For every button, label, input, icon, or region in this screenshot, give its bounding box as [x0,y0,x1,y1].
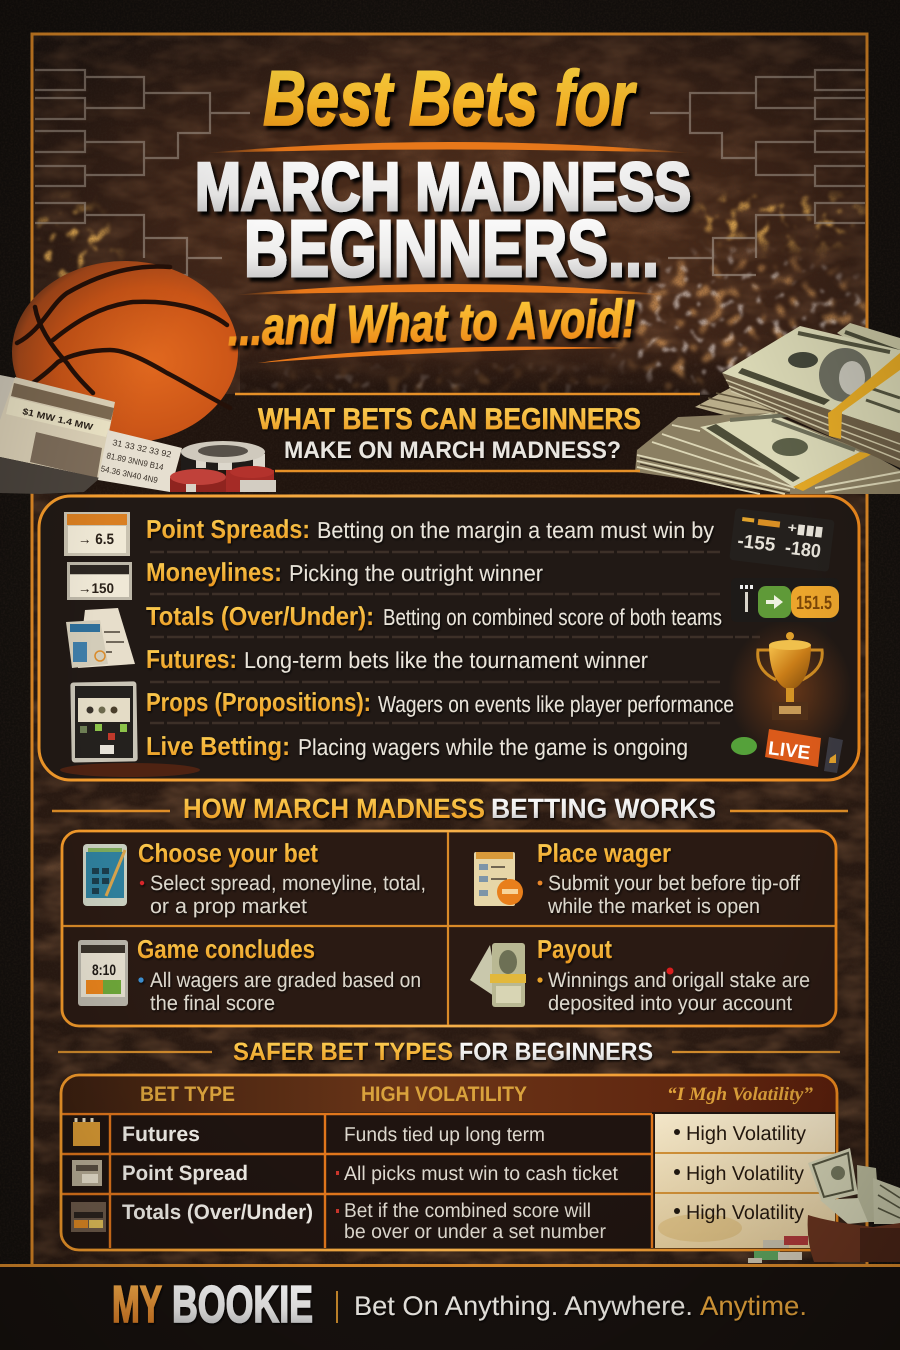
step: game concludes: All wagers are graded based on [150,969,421,992]
row: totals: Betting on combined score of both teams [383,604,722,630]
tagline: Anytime. [700,1291,807,1321]
step: choose your bet: Choose your bet [138,838,318,868]
title line: Beginners: BEGINNERS... [244,204,659,293]
row: totals [146,601,722,631]
section heading: how it works: HOW MARCH MADNESS [183,793,485,824]
logo [112,1276,313,1334]
section heading: how it works: BETTING WORKS [491,793,716,824]
row: point spread [122,1162,804,1185]
icon: total line [731,578,839,622]
lower strap [793,452,872,491]
upper stack top [722,326,900,433]
row: totals: Totals (Over/Under): [146,601,374,631]
upper strap [828,353,900,439]
section heading: safer bet types: SAFER BET TYPES [233,1038,453,1066]
icon: spread card [72,1160,102,1186]
icon: trophy [758,632,822,720]
section heading: safer bet types: FOR BEGINNERS [459,1038,653,1066]
betting tickets [0,375,182,494]
row: point spread: High Volatility [686,1163,804,1185]
icon: moneyline ticket [67,562,132,600]
icon: odds board [729,508,835,572]
ticket large [0,377,115,478]
step: payout: deposited into your account [548,992,792,1015]
row: point spread: All picks must win to cash ticket [344,1163,618,1185]
icon: phone with pen [83,844,127,906]
row: props: Props (Propositions): [146,687,371,717]
icon: odds board: +▮▮▮ [787,520,824,539]
icon: props tablet [70,681,138,762]
title line: Best Bets for: Best Bets for [263,54,637,142]
table header band: HIGH VOLATILITY [361,1083,527,1106]
row: futures [146,644,648,674]
row: live betting [146,731,688,761]
step: place wager: Submit your bet before tip-off [548,872,800,895]
title line: and what to avoid: ...and What to Avoid! [227,289,636,357]
icon: totals board [71,1202,106,1232]
section heading: what bets: MAKE ON MARCH MADNESS? [284,437,621,464]
icon: total line: 151.5 [796,593,832,614]
front bill [808,1148,858,1202]
step: game concludes [137,934,421,1015]
icon: spread ticket [64,512,130,556]
step: place wager [537,838,800,918]
icon: live badge [731,729,843,773]
betting tickets: $1 MW 1.4 MW [22,406,95,432]
section heading: what bets [235,394,700,471]
tagline: Bet On Anything. Anywhere. [354,1291,693,1321]
panel: bet types [39,496,859,780]
swoosh above march madness [205,142,692,153]
row: futures: Funds tied up long term [344,1124,545,1146]
step: choose your bet [138,838,426,918]
row: moneylines: Picking the outright winner [289,560,543,586]
row: point spread: Point Spread [122,1162,248,1185]
step: payout [537,934,810,1015]
section heading: safer bet types [58,1038,840,1066]
ticket dark base [0,457,100,494]
icon: wager slip [474,852,523,906]
icon: live badge: LIVE [767,738,811,764]
step: payout: Payout [537,934,612,964]
title [195,54,692,363]
section heading: how it works [52,793,848,824]
title line: March Madness: MARCH MADNESS [195,149,691,225]
row: totals: Totals (Over/Under) [122,1201,313,1224]
row: totals [122,1200,804,1243]
row: totals: be over or under a set number [344,1221,606,1243]
betting tickets: 31 33 32 33 92 [112,437,173,459]
icon: odds board: -155 [736,531,777,556]
icon: totals sheet [66,608,135,668]
logo: MY [112,1276,162,1334]
table header band: “I Mgh Volatility” [667,1084,814,1105]
stacks of cash [635,323,900,494]
tournament brackets [35,70,865,275]
icon: score tablet: 8:10 [92,962,116,979]
swoosh under avoid [258,347,622,363]
red speck [666,968,674,974]
step: choose your bet: Select spread, moneyline, total, [150,872,426,895]
row: live betting: Placing wagers while the game is ongoing [298,734,688,760]
icon: spread ticket: → 6.5 [78,531,114,548]
row: futures: Long-term bets like the tournament winner [244,647,648,673]
betting tickets: 54.36 3N40 4N9 [100,463,159,485]
step: choose your bet: or a prop market [150,895,307,918]
row: moneylines: Moneylines: [146,557,282,587]
row: futures [122,1123,806,1146]
back bill [837,323,900,370]
swoosh under beginners [235,284,668,295]
back stack [695,388,790,422]
footer [0,1264,900,1350]
row: futures: Futures: [146,644,237,674]
table border [61,1075,837,1250]
wallet with cash and chips [748,1148,900,1263]
table header band [62,1076,836,1112]
upper stack side [722,373,900,468]
icon: odds board: -180 [784,538,822,563]
row: point spreads: Betting on the margin a team must win by [317,517,714,543]
icon: moneyline ticket: →150 [78,580,114,596]
chips pile [748,1236,808,1263]
logo: BOOKIE [172,1276,313,1334]
row: totals: High Volatility [686,1202,804,1224]
section heading: what bets: WHAT BETS CAN BEGINNERS [258,403,641,436]
lower stack top bill [700,413,860,487]
cream column [655,1114,835,1248]
footer divider [336,1291,338,1323]
panel: steps grid [62,831,836,1026]
lower stack [635,413,900,494]
row: futures: Futures [122,1123,200,1146]
basketball [12,261,238,443]
icon: score tablet [78,940,128,1006]
row: point spreads [146,514,714,544]
icon: futures folder [73,1118,100,1146]
row: live betting: Live Betting: [146,731,290,761]
table: bet comparison [61,1075,837,1250]
row: moneylines [146,557,543,587]
row: totals: Bet if the combined score will [344,1200,591,1222]
wallet body [808,1215,900,1262]
step: payout: Winnings and origall stake are [548,969,810,992]
step: game concludes: the final score [150,992,275,1015]
row: props: Wagers on events like player performance [378,691,734,717]
icon: cash stack [470,943,526,1007]
ticket back sliver [0,375,15,430]
bill fan [857,1165,880,1222]
row: point spreads: Point Spreads: [146,514,310,544]
table rules [62,1114,652,1248]
table header band: BET TYPE [140,1083,235,1106]
step: place wager: Place wager [537,838,671,868]
betting tickets: 81.89 3NN9 B14 [106,450,165,472]
step: game concludes: Game concludes [137,934,315,964]
ticket small [98,430,182,492]
row: props [146,687,734,717]
poker chips [170,441,276,492]
row: futures: High Volatility [686,1123,806,1145]
step: place wager: while the market is open [547,895,760,918]
